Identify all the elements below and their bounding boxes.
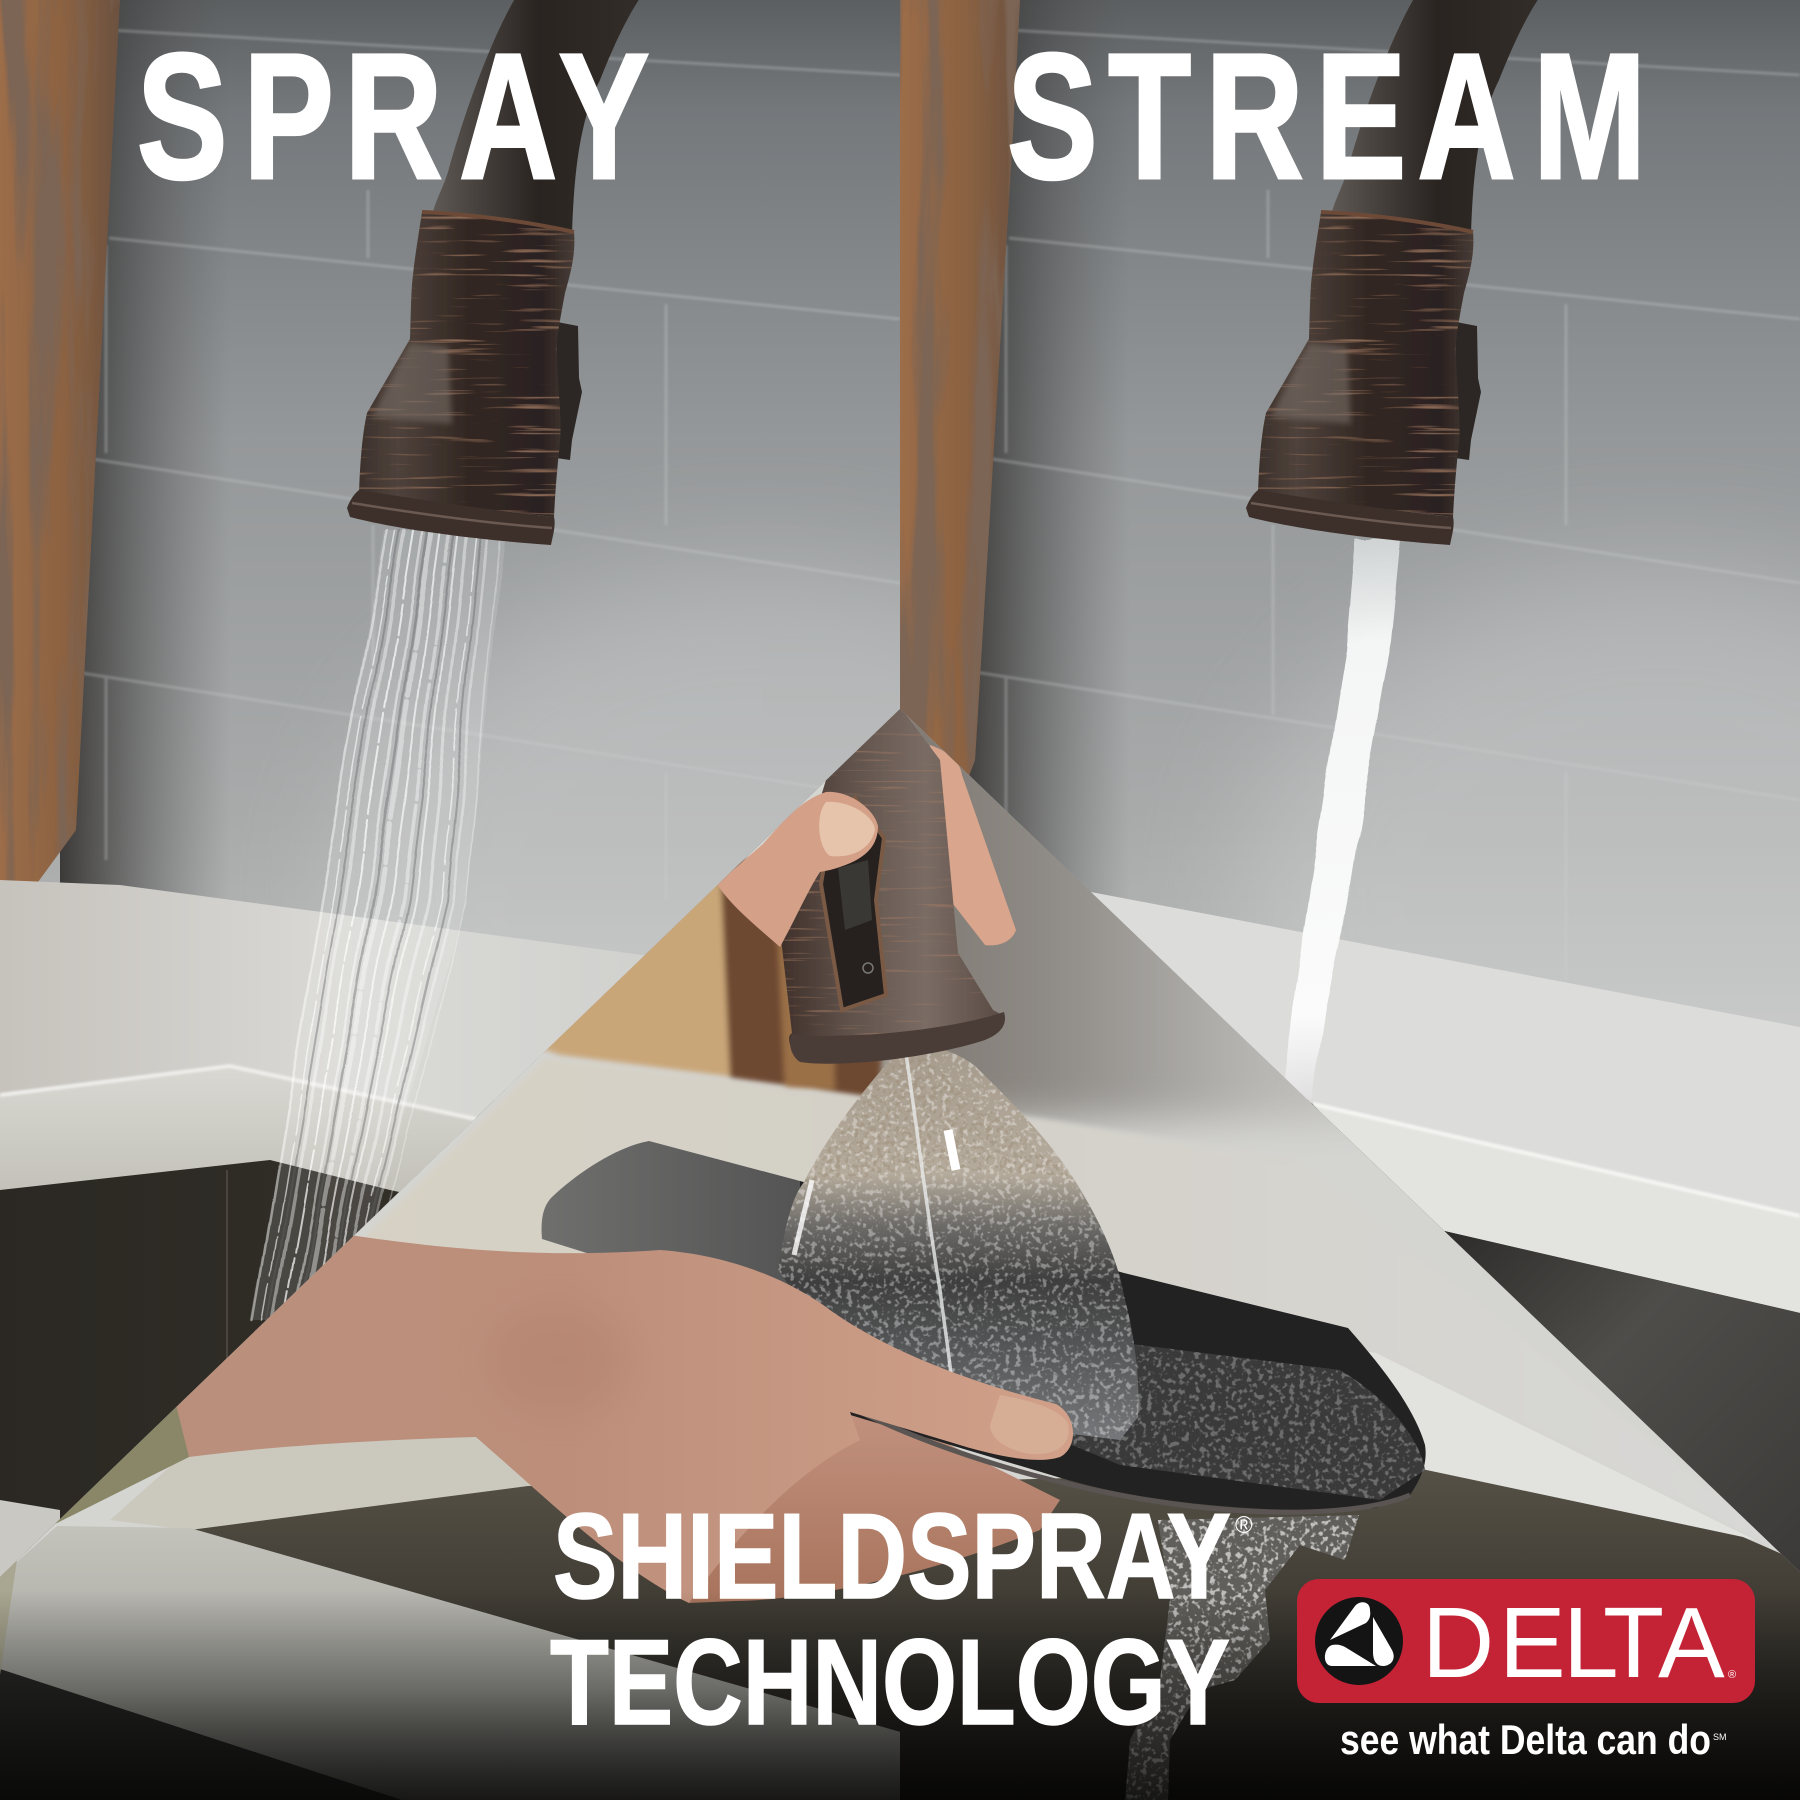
- counter surface: [200, 1058, 1800, 1560]
- fingernail: [819, 802, 875, 856]
- inverted faucet head: [780, 700, 1004, 1057]
- heading: SPRAY: SPRAY: [137, 16, 649, 216]
- sink lip: [0, 1076, 472, 1192]
- sink basin: [1440, 1230, 1800, 1600]
- logo red badge: [1297, 1579, 1755, 1703]
- hand soft shading: [490, 1305, 630, 1415]
- background wood blocks: [520, 860, 890, 1100]
- panel: stream scene: [900, 0, 1800, 1600]
- sink basin: [0, 1160, 399, 1518]
- thumbnail: [990, 1395, 1069, 1454]
- water stream: [1282, 540, 1402, 1100]
- countertop: [0, 880, 644, 1300]
- head rim: [790, 1012, 1005, 1064]
- wooden cutting board: [0, 0, 120, 893]
- water bell: [778, 1043, 1138, 1440]
- icon: Delta triangle mark: [1315, 1597, 1403, 1685]
- plate back-left: [542, 1141, 800, 1320]
- heading: ShieldSpray Technology: ®: [1235, 1512, 1253, 1539]
- background wall: [0, 0, 900, 1100]
- blurred background: [0, 700, 1800, 1800]
- tagline: SM: [1713, 1732, 1726, 1742]
- head switch panel: [821, 798, 886, 1010]
- water falling from plate: [1125, 1515, 1359, 1800]
- registered mark: ®: [1728, 1669, 1736, 1681]
- water sheet on plate: [1060, 1340, 1425, 1500]
- logo wordmark: DELTA: [1422, 1587, 1725, 1699]
- bottom vignette: [0, 1590, 1800, 1800]
- plate: [542, 1141, 1426, 1512]
- counter lip: [1200, 1340, 1755, 1540]
- counter lip: [1313, 1104, 1800, 1313]
- lower counter band: [110, 1430, 860, 1530]
- panel: spray scene: [0, 0, 900, 1577]
- heading: ShieldSpray Technology: TECHNOLOGY: [550, 1614, 1230, 1750]
- sink basin: [190, 1468, 1800, 1800]
- wooden cutting board: [900, 0, 1020, 800]
- far fingers: [925, 745, 1016, 945]
- countertop: [1070, 888, 1800, 1216]
- heading: STREAM: STREAM: [1007, 16, 1646, 216]
- plate front: [800, 1181, 1426, 1510]
- sleeve cuff: [40, 1360, 212, 1530]
- spray water: [250, 530, 505, 1320]
- background wall: [900, 0, 1800, 1100]
- faucet stream head: [1246, 0, 1541, 545]
- heading: ShieldSpray Technology: [550, 1488, 1253, 1750]
- logo: Delta: [1297, 1579, 1755, 1703]
- panel: ShieldSpray scene: [0, 680, 1800, 1800]
- tagline: see what Delta can do: [1340, 1716, 1711, 1763]
- heading: ShieldSpray Technology: SHIELDSPRAY: [553, 1488, 1231, 1624]
- front counter: [0, 1526, 900, 1800]
- faucet spray head: [347, 0, 642, 545]
- near finger: [717, 792, 878, 947]
- hand and thumb: [150, 1235, 1073, 1603]
- lower palm: [476, 1400, 1060, 1603]
